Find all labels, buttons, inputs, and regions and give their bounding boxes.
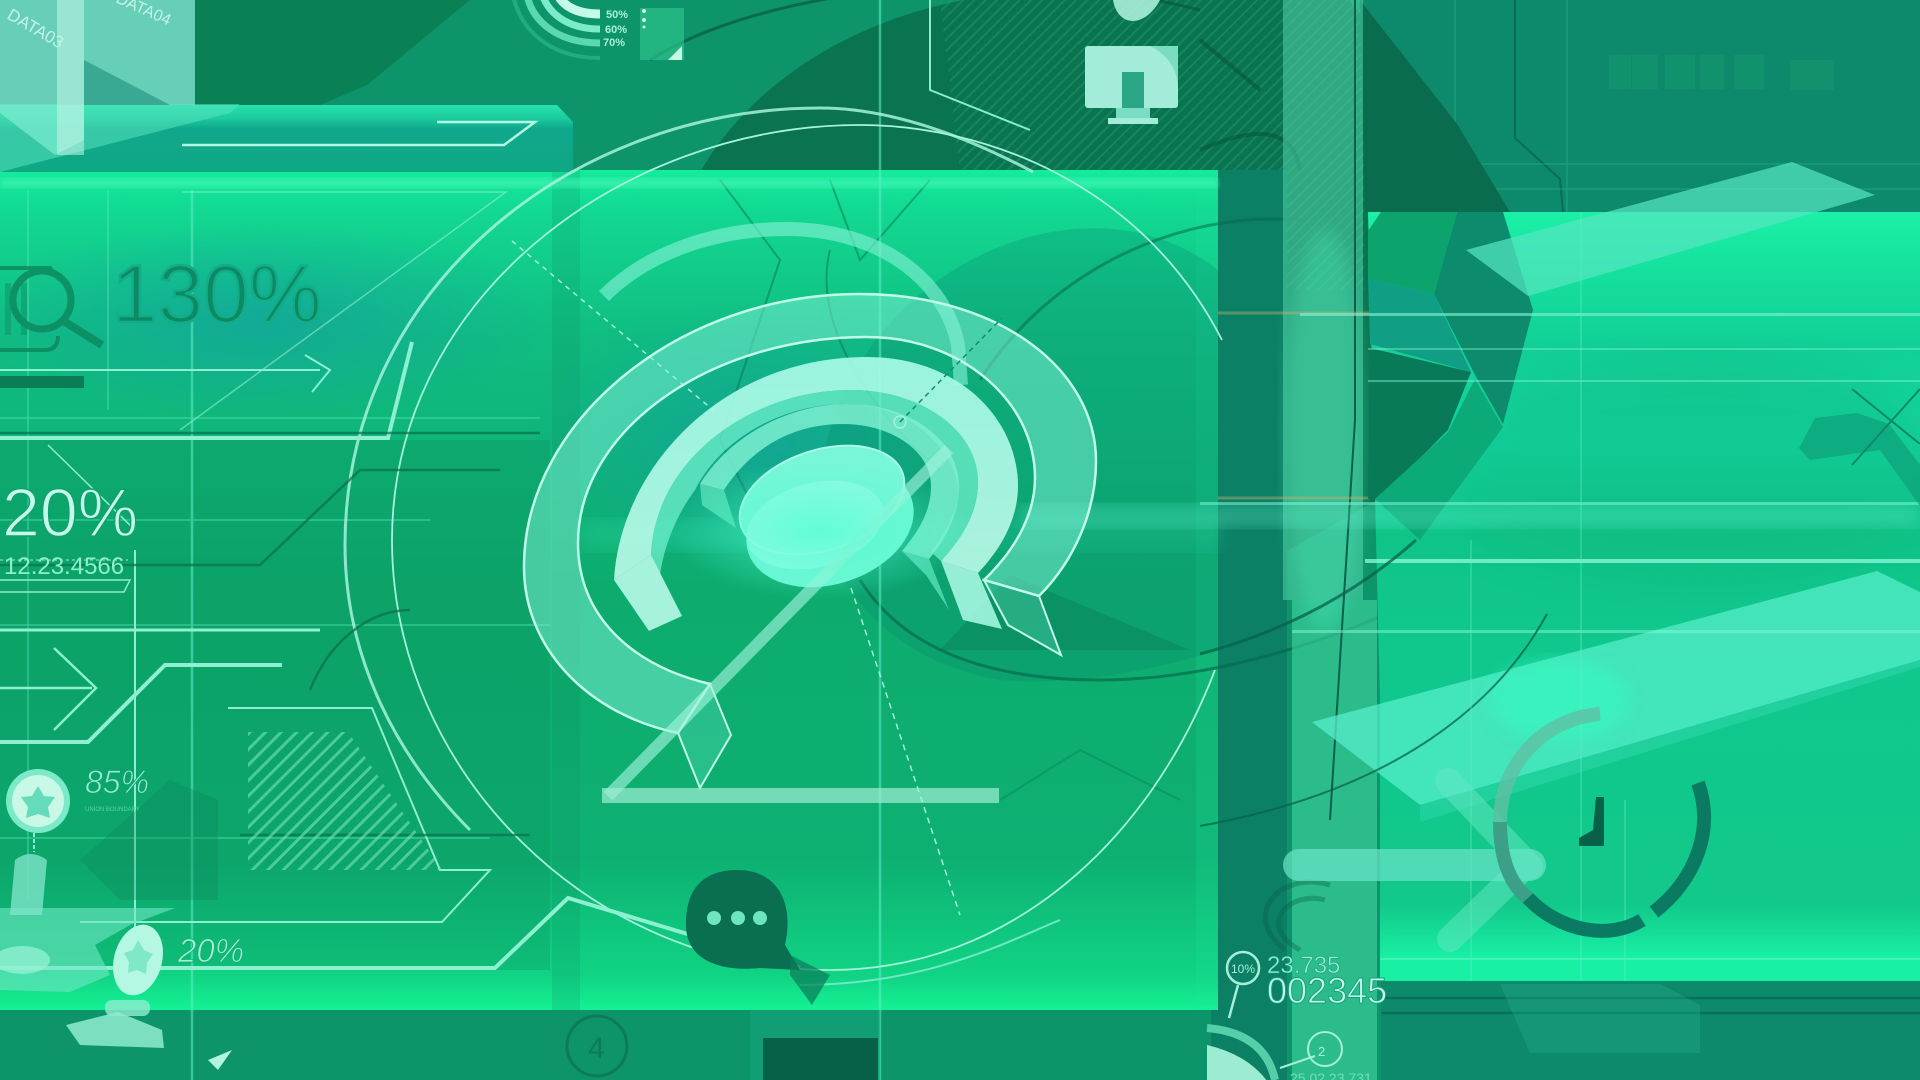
hatched block bbox=[80, 732, 442, 900]
chart: top radial percentages bbox=[512, 0, 684, 60]
chart: top radial percentages: 50% bbox=[606, 9, 628, 21]
panel: top left slab bbox=[0, 104, 573, 172]
icon: map and pins bbox=[0, 854, 232, 1070]
icon: number four circle bbox=[567, 1016, 627, 1076]
top left dark wedge bbox=[195, 0, 470, 105]
text: 85 percent: UNION BOUNDARY bbox=[85, 807, 140, 813]
dark ellipse overlay inside panel bbox=[720, 180, 1530, 800]
icon: leaf silhouette right edge bbox=[1799, 389, 1920, 506]
gauge inner band bbox=[700, 404, 959, 559]
soft glow over gauge core bbox=[670, 460, 970, 600]
icon: monitor bbox=[930, 0, 1178, 130]
dark bar under arrow bbox=[0, 376, 84, 388]
text: 130 percent: 130% bbox=[112, 249, 322, 340]
gauge core bbox=[730, 444, 930, 608]
upper right parallelogram bbox=[1466, 162, 1875, 296]
icon: star badge bbox=[6, 769, 70, 852]
readout: bottom numbers: 23.735 bbox=[1267, 952, 1340, 979]
gauge markers bbox=[713, 409, 725, 421]
icon: magnifier and document bbox=[0, 268, 102, 350]
bright horizontal light streaks bbox=[0, 178, 1920, 960]
sphere facets on right panel bbox=[1368, 212, 1533, 540]
gauge pointer bbox=[608, 449, 949, 796]
chart: top radial percentages: 60% bbox=[605, 24, 627, 36]
text: 20 percent small: 20% bbox=[177, 932, 244, 969]
gauge outer band end walls bbox=[678, 580, 1061, 788]
panel: upper right dark area bbox=[1365, 0, 1920, 212]
readout: bottom numbers: 002345 bbox=[1267, 970, 1387, 1011]
panel: large central green panel bbox=[0, 170, 1220, 1010]
chart: top radial percentages: 70% bbox=[603, 37, 625, 49]
gauge outer band bbox=[524, 294, 1096, 733]
panel: vertical light column bbox=[1218, 0, 1377, 1080]
readout: bottom numbers: 10% bbox=[1231, 962, 1255, 976]
large concentric HUD circles bbox=[345, 108, 1222, 985]
text: 20 percent large: 20% bbox=[2, 475, 138, 551]
dark circuit lines bbox=[0, 433, 540, 835]
gauge thick arc inner wall bbox=[651, 390, 978, 575]
gauge thick arc bbox=[614, 357, 1018, 580]
icon: data cubes top left: DATA03 bbox=[4, 5, 67, 52]
text: 85 percent: 85% bbox=[85, 764, 149, 800]
dark curves lower right bbox=[1200, 540, 1547, 950]
dark sphere behind the gauge bbox=[650, 0, 1530, 1080]
text: phone number: 12.23.4566 bbox=[4, 553, 124, 580]
left data frame lines bbox=[0, 192, 800, 968]
panel: right green panel bbox=[1368, 212, 1920, 981]
icon: number four circle: 4 bbox=[588, 1032, 605, 1065]
readout: bottom numbers bbox=[1207, 952, 1387, 1080]
readout: bottom numbers: 2 bbox=[1318, 1044, 1325, 1059]
lower right large parallelogram bbox=[1312, 571, 1920, 822]
panel: bottom strip bbox=[750, 981, 1920, 1080]
gauge: concentric 3D arcs bbox=[524, 229, 1096, 803]
icon: data cubes top left bbox=[0, 0, 195, 155]
icon: speech bubble bbox=[686, 870, 830, 1005]
icon: clock bbox=[1299, 714, 1704, 939]
gauge small top arc bbox=[604, 229, 961, 385]
